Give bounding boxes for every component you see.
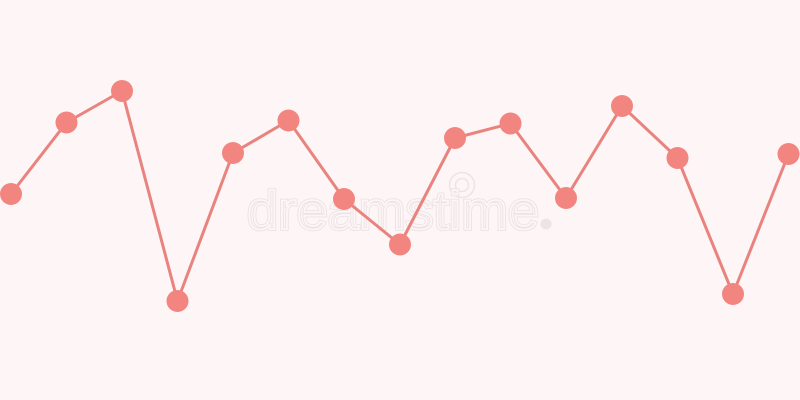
watermark: dreamstime (247, 181, 539, 241)
watermark: dreamstime (247, 181, 539, 241)
line series (11, 91, 788, 301)
data point markers (0, 80, 800, 312)
